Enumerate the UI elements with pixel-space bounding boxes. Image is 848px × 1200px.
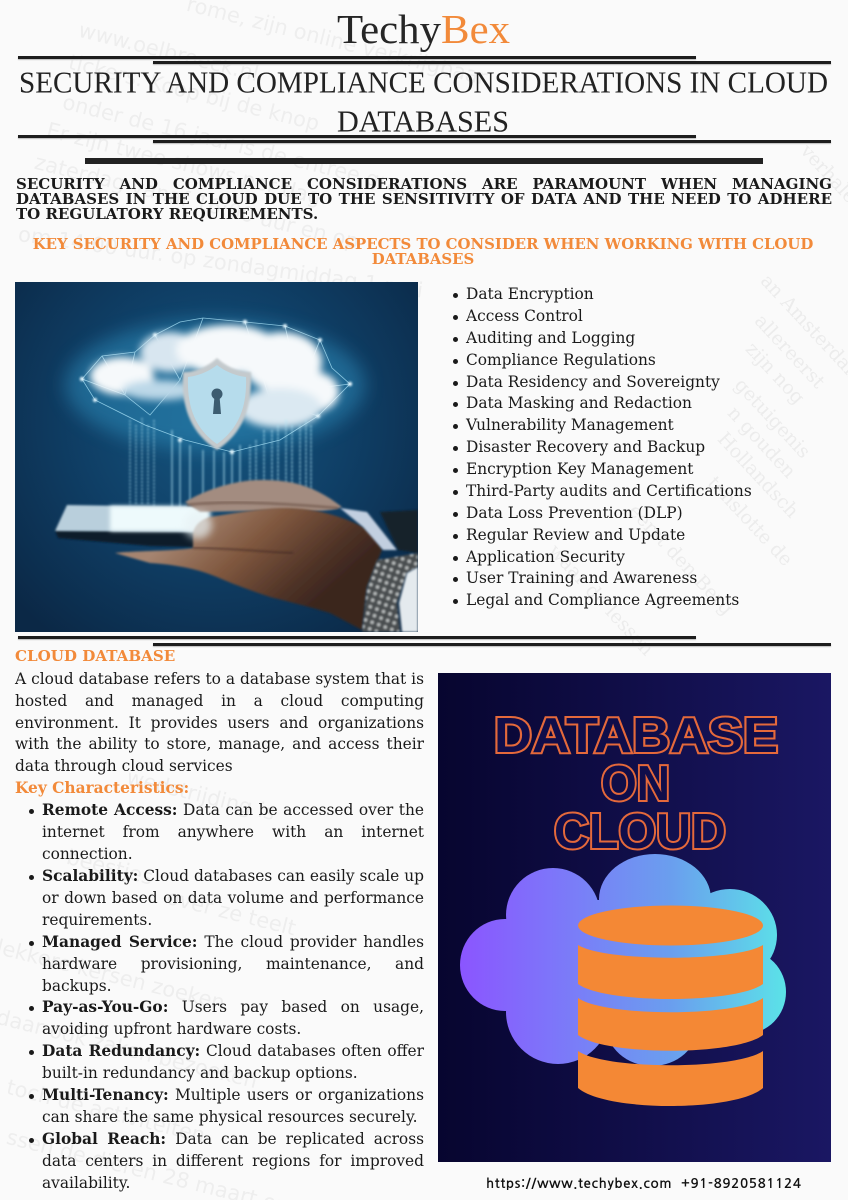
bullet list: security aspects: Encryption Key Management [466,460,693,478]
image: database on cloud [438,673,831,1162]
background watermark text: beestjes [64,845,155,890]
background watermark text: allereerst [750,310,829,393]
bullet list: security aspects: Data Masking and Redaction [466,394,692,412]
glow nodes [80,320,352,454]
thick divider [85,158,763,164]
bullet list: security aspects [453,285,752,609]
bullet list: security aspects: Disaster Recovery and Backup [466,438,705,456]
gradient cloud [460,854,786,1066]
section rules [18,636,832,648]
bullet list: key characteristics: Data Redundancy: Cloud databases often offer [42,1042,424,1060]
intro paragraph [16,175,832,223]
bullet list: key characteristics: Remote Access: Data can be accessed over the [42,801,424,819]
background watermark text: waar de lessen [544,540,658,660]
heading: cloud database: CLOUD DATABASE [15,647,175,665]
background watermark text: zaterdag vanaf 16:00 uur en op [32,150,361,254]
bullet list: key characteristics: availability. [42,1174,130,1192]
background watermark text: daar ook zaken bezoeken [0,1005,260,1093]
bullet list: security aspects: Auditing and Logging [466,329,635,347]
bullet list: key characteristics: backups. [42,976,112,994]
phone [55,505,210,547]
network mesh [82,318,350,452]
bullet list: security aspects: Application Security [466,548,625,566]
background watermark text: toch de activiteiten [4,1075,208,1148]
bullet list: key characteristics: or down based on data volume and performance [42,889,424,907]
title [19,64,828,134]
image: cloud security with shield over phone [15,282,418,632]
shield with keyhole [183,358,251,450]
outlined title text: ON [601,757,670,811]
bullet list: key characteristics: data centers in different regions for improved [42,1152,424,1170]
cloud [90,325,339,428]
background watermark text: wedstrijding is [124,765,278,825]
bullet list: key characteristics: Scalability: Cloud databases can easily scale up [42,867,424,885]
bullet list: key characteristics: can share the same physical resources securely. [42,1108,417,1126]
bullet list: security aspects: Legal and Compliance Agreements [466,591,739,609]
bullet list: security aspects: Access Control [466,307,583,325]
image background [15,282,418,632]
bullet list: key characteristics [29,801,424,1192]
orange subheading [33,235,813,268]
intro paragraph: TO REGULATORY REQUIREMENTS. [16,205,318,223]
outlined title text: DATABASE [494,709,778,763]
intro paragraph: DATABASES IN THE CLOUD DUE TO THE SENSITIVITY OF DATA AND THE NEED TO ADHERE [16,190,832,208]
bullet list: key characteristics: Multi-Tenancy: Multiple users or organizations [42,1086,424,1104]
bullet list: security aspects: Data Encryption [466,285,594,303]
intro paragraph: SECURITY AND COMPLIANCE CONSIDERATIONS ARE PARAMOUNT WHEN MANAGING [16,175,832,193]
bullet list: key characteristics: Global Reach: Data can be replicated across [42,1130,424,1148]
orange subheading: KEY SECURITY AND COMPLIANCE ASPECTS TO CONSIDER WHEN WORKING WITH CLOUD [33,235,813,253]
data rain [130,418,311,510]
background watermark text: lekkere kersen zoeken [0,935,227,1015]
outlined title text [494,709,778,859]
background watermark text: om 14:00 uur. op zondagmiddag 1 mei [17,222,425,303]
bullet list: key characteristics: Managed Service: The cloud provider handles [42,933,424,951]
bullet list: security aspects: Data Loss Prevention (DLP) [466,504,683,522]
bullet list: key characteristics: internet from anywhere with an internet [42,823,424,841]
background watermark text: www.oelbroeck.nl [76,18,261,86]
cloud glow [65,320,365,450]
background watermark text: n gouden [723,402,800,483]
sleeve and cuff [380,510,418,553]
background watermark text: over ze teelt [164,885,298,940]
paragraph: cloud database definition: A cloud database refers to a database system that is [15,670,424,688]
paragraph: cloud database definition: data through cloud services [15,757,233,775]
wristwatch [362,553,418,632]
bullet list: key characteristics: built-in redundancy and backup options. [42,1064,358,1082]
bullet list: key characteristics: requirements. [42,911,152,929]
bullet list: key characteristics: Pay-as-You-Go: Users pay based on usage, [42,998,424,1016]
database cylinder [578,906,763,1106]
bullet list: security aspects: Regular Review and Update [466,526,685,544]
outlined title text: CLOUD [554,805,726,859]
paragraph: cloud database definition: environment. It provides users and organizations [15,714,424,732]
bullet list: key characteristics: connection. [42,845,133,863]
background watermark text: getuigenis [730,374,815,463]
background watermark text: onder de 16 jaar is de entree gratis [60,90,427,203]
heading: key characteristics: Key Characteristics: [15,779,189,797]
title rules bottom [18,135,832,144]
paragraph: cloud database definition [14,670,424,775]
background watermark text: tickers. Koop bij de knop [66,50,322,136]
bullet list: key characteristics: hardware provisioning, maintenance, and [42,955,424,973]
bullet list: security aspects: Compliance Regulations [466,351,656,369]
bullet list: security aspects: Third-Party audits and Certifications [466,482,752,500]
paragraph: cloud database definition: with the ability to store, manage, and access their [15,735,424,753]
footer contact: https://www.techybex.com +91-8920581124 [486,1177,801,1191]
bullet list: security aspects: User Training and Awareness [466,569,697,587]
hand [115,480,382,630]
background watermark text: Hollandsch [713,428,803,522]
bullet list: security aspects: Vulnerability Management [466,416,674,434]
paragraph: cloud database definition: hosted and managed in a cloud computing [15,692,424,710]
background watermark text: zijn nog [741,338,809,409]
bullet list: key characteristics: avoiding upfront hardware costs. [42,1020,301,1038]
background watermark text: Er zijn twee shows per dag [44,118,324,210]
background watermark text: tenslotte de [703,472,797,571]
image background [438,673,831,1162]
title rules top [18,56,832,66]
bullet list: security aspects: Data Residency and Sovereignty [466,372,720,390]
orange subheading: DATABASES [372,250,474,268]
background watermark text: eerst den Berg [624,500,738,620]
